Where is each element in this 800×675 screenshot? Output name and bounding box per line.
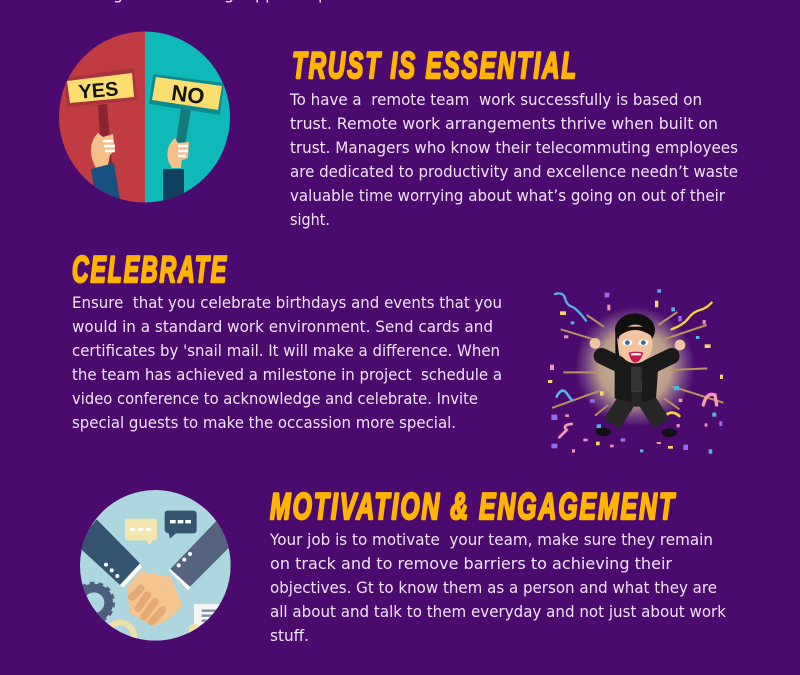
icon: yes and no signs [59,31,231,203]
text block: trust: valuable time worrying about what’s going on out of their [290,186,725,205]
heading: trust is essential: TRUST IS ESSENTIAL [292,45,578,86]
text block: motivation: on track and to remove barriers to achieving their [270,554,672,573]
text block: trust: trust. Managers who know their telecommuting employees [290,138,738,157]
text block: celebrate: special guests to make the occassion more special. [72,413,456,432]
text block: celebrate: certificates by 'snail mail. It will make a difference. When [72,341,500,360]
icon: yes and no signs: NO [170,80,206,109]
head and hair [615,313,655,347]
text block: celebrate: video conference to acknowledge and celebrate. Invite [72,389,478,408]
text block: motivation: objectives. Gt to know them as a person and what they are [270,578,717,597]
cropped text line at top [113,0,328,3]
heading: celebrate: CELEBRATE [72,249,228,290]
speech bubbles [125,519,157,545]
text block: motivation: all about and talk to them everyday and not just about work [270,602,727,621]
document [194,604,220,630]
text block: trust [289,90,738,229]
arms and jacket [602,356,672,367]
text block: motivation: Your job is to motivate your team, make sure they remain [269,530,713,549]
icon: handshake [80,490,231,641]
text block: trust: To have a remote team work successfully is based on [289,90,702,109]
text block: motivation: stuff. [270,626,309,645]
text block: celebrate: Ensure that you celebrate birthdays and events that you [72,293,502,312]
icon: yes and no signs: YES [78,78,119,104]
right sleeve [170,521,228,587]
text block: motivation [269,530,727,645]
gear [79,588,109,617]
text block: trust: are dedicated to productivity and excellence needn’t waste [290,162,738,181]
text block: trust: sight. [290,210,330,229]
icon: celebrating avatar with confetti [548,289,723,454]
text block: celebrate: would in a standard work environment. Send cards and [72,317,493,336]
hands [127,571,183,627]
left sleeve [77,519,140,585]
text block: celebrate [72,293,502,432]
legs [612,395,662,424]
text block: celebrate: the team has achieved a milestone in project schedule a [72,365,502,384]
text block: trust: trust. Remote work arrangements thrive when built on [290,114,718,133]
